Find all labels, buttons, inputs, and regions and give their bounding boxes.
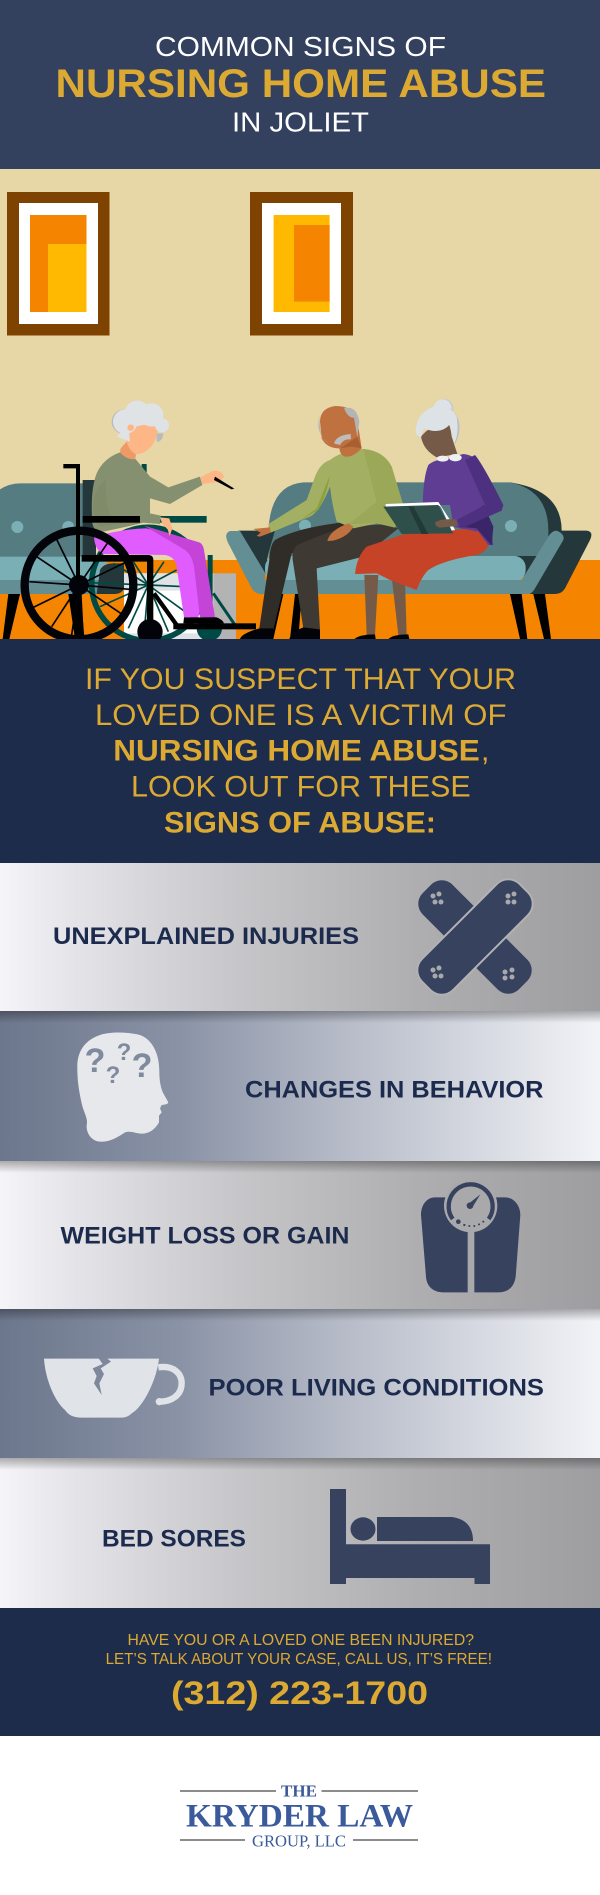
label: BED SORES (102, 1526, 246, 1553)
pointing hand with pen (200, 471, 234, 489)
phone number: (312) 223-1700 (171, 1675, 428, 1711)
picture frame left (7, 192, 110, 336)
label: POOR LIVING CONDITIONS (208, 1374, 544, 1401)
wheelchair rear parts (83, 464, 235, 641)
trousers (240, 522, 398, 639)
skirt (355, 529, 488, 590)
question marks: ? (106, 1062, 120, 1089)
face (126, 425, 157, 454)
logo group llc: GROUP, LLC (252, 1832, 346, 1851)
hair (112, 401, 169, 442)
open book (383, 502, 457, 534)
icon: cracked cup (44, 1358, 182, 1418)
hand on knee (160, 517, 172, 536)
logo the: THE (281, 1782, 317, 1801)
neck (120, 442, 137, 459)
elderly woman (354, 399, 503, 639)
comma: , (481, 735, 489, 768)
intro line 5: SIGNS OF ABUSE: (164, 807, 436, 840)
head (416, 399, 462, 462)
head (318, 406, 362, 457)
illustration: nursing home lounge (0, 169, 600, 644)
intro line 1: IF YOU SUSPECT THAT YOUR (85, 663, 516, 696)
torso (92, 452, 202, 532)
intro line 4: LOOK OUT FOR THESE (131, 771, 471, 804)
logo: The Kryder Law Group (0, 1736, 600, 1895)
trousers (94, 526, 224, 623)
elderly man (240, 406, 403, 639)
icon: bathroom scale (421, 1179, 520, 1293)
sweater (268, 449, 403, 533)
right sofa (226, 482, 591, 639)
picture frame right (250, 192, 353, 336)
side table (124, 573, 236, 639)
sign 2: changes in behavior (0, 1011, 600, 1161)
icon: crossed bandages (409, 871, 541, 1003)
label: UNEXPLAINED INJURIES (53, 923, 359, 950)
header panel (0, 0, 600, 169)
question marks (85, 1039, 152, 1089)
sweater (423, 454, 503, 546)
label: WEIGHT LOSS OR GAIN (60, 1222, 350, 1249)
icon: head with question marks (77, 1032, 168, 1142)
legs (354, 575, 409, 639)
sign 4: poor living conditions (0, 1309, 600, 1458)
woman in wheelchair (25, 401, 256, 644)
wheelchair frame and wheel (25, 464, 256, 644)
sign 5: bed sores (0, 1458, 600, 1608)
call to action panel (0, 1608, 600, 1736)
title line 1: COMMON SIGNS OF (155, 31, 446, 62)
title line 2: NURSING HOME ABUSE (56, 62, 546, 106)
icon: person in bed (330, 1489, 490, 1584)
cta line 2: LET’S TALK ABOUT YOUR CASE, CALL US, IT’S FREE! (106, 1651, 492, 1668)
logo kryder law: KRYDER LAW (186, 1799, 413, 1835)
question marks: ? (132, 1047, 152, 1085)
hands (253, 523, 353, 541)
title line 3: IN JOLIET (232, 106, 369, 138)
cta line 1: HAVE YOU OR A LOVED ONE BEEN INJURED? (128, 1632, 474, 1649)
intro line 2: LOVED ONE IS A VICTIM OF (95, 699, 506, 732)
sign 3: weight loss or gain (0, 1161, 600, 1309)
left sofa (0, 483, 124, 639)
intro panel (0, 639, 600, 863)
question marks: ? (85, 1042, 105, 1080)
intro line 3: NURSING HOME ABUSE (113, 735, 480, 768)
sign 1: unexplained injuries (0, 863, 600, 1011)
question marks: ? (117, 1039, 131, 1066)
label: CHANGES IN BEHAVIOR (245, 1076, 544, 1103)
